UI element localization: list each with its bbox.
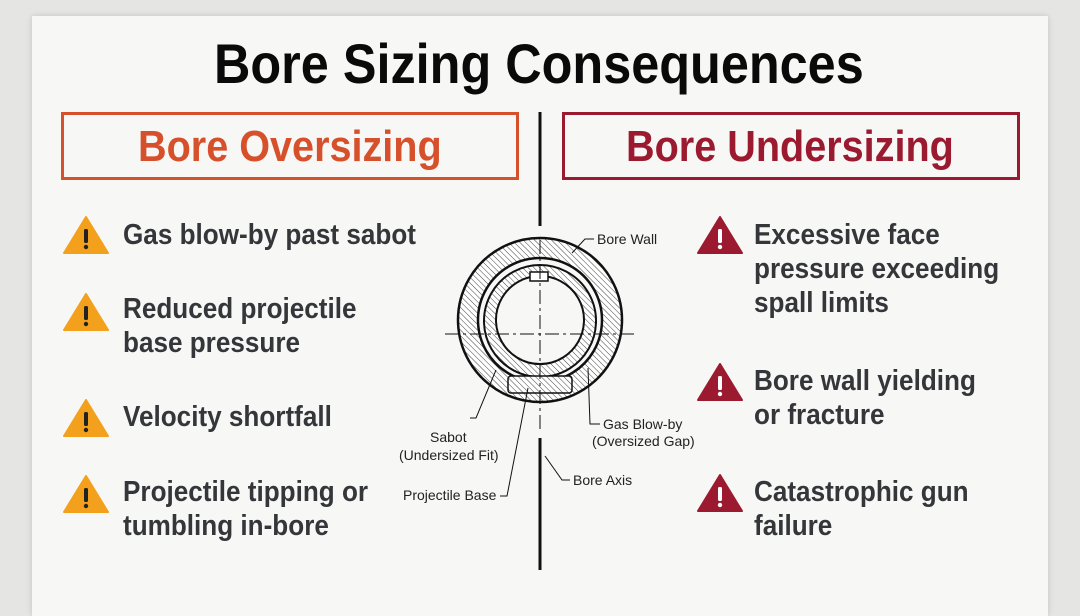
icon: warning <box>63 293 109 331</box>
text <box>754 476 969 542</box>
label: Bore Axis: Bore Axis <box>573 472 632 488</box>
text <box>123 476 368 542</box>
label: Gas Blow-by: Gas Blow-by <box>603 416 682 432</box>
text: Catastrophic gun <box>754 476 969 508</box>
icon: danger <box>697 474 743 512</box>
label: Bore Axis <box>545 456 632 488</box>
icon: warning <box>63 475 109 513</box>
center divider and diagram <box>399 112 695 570</box>
text: base pressure <box>123 327 300 359</box>
text <box>123 293 357 359</box>
text: tumbling in-bore <box>123 510 329 542</box>
label: Sabot: Sabot <box>430 429 467 445</box>
icon: danger <box>697 363 743 401</box>
text: Reduced projectile <box>123 293 357 325</box>
cross-section diagram <box>399 231 695 503</box>
label: Gas Blow-by: (Oversized Gap) <box>592 433 695 449</box>
left list <box>63 216 416 542</box>
text: Velocity shortfall <box>123 401 332 433</box>
label: Bore Wall <box>572 231 657 253</box>
label: Bore Wall: Bore Wall <box>597 231 657 247</box>
icon: warning <box>63 399 109 437</box>
text: Gas blow-by past sabot <box>123 219 416 251</box>
label: Sabot: (Undersized Fit) <box>399 447 499 463</box>
text: Projectile tipping or <box>123 476 368 508</box>
label: Projectile Base <box>403 388 528 503</box>
label: Gas Blow-by <box>588 368 695 449</box>
label: Sabot <box>399 370 499 463</box>
header: Bore Oversizing <box>61 112 519 180</box>
text: Excessive face <box>754 219 940 251</box>
title: Bore Sizing Consequences <box>214 32 864 95</box>
text: Bore wall yielding <box>754 365 976 397</box>
text: pressure exceeding <box>754 253 999 285</box>
label: Projectile Base: Projectile Base <box>403 487 497 503</box>
header: Bore Oversizing: Bore Oversizing <box>138 122 442 171</box>
right list <box>697 216 999 542</box>
text: or fracture <box>754 399 885 431</box>
header: Bore Undersizing: Bore Undersizing <box>626 122 954 171</box>
header: Bore Undersizing <box>562 112 1020 180</box>
text <box>754 219 999 319</box>
text: failure <box>754 510 832 542</box>
icon: danger <box>697 216 743 254</box>
icon: warning <box>63 216 109 254</box>
text: spall limits <box>754 287 889 319</box>
text <box>754 365 976 431</box>
